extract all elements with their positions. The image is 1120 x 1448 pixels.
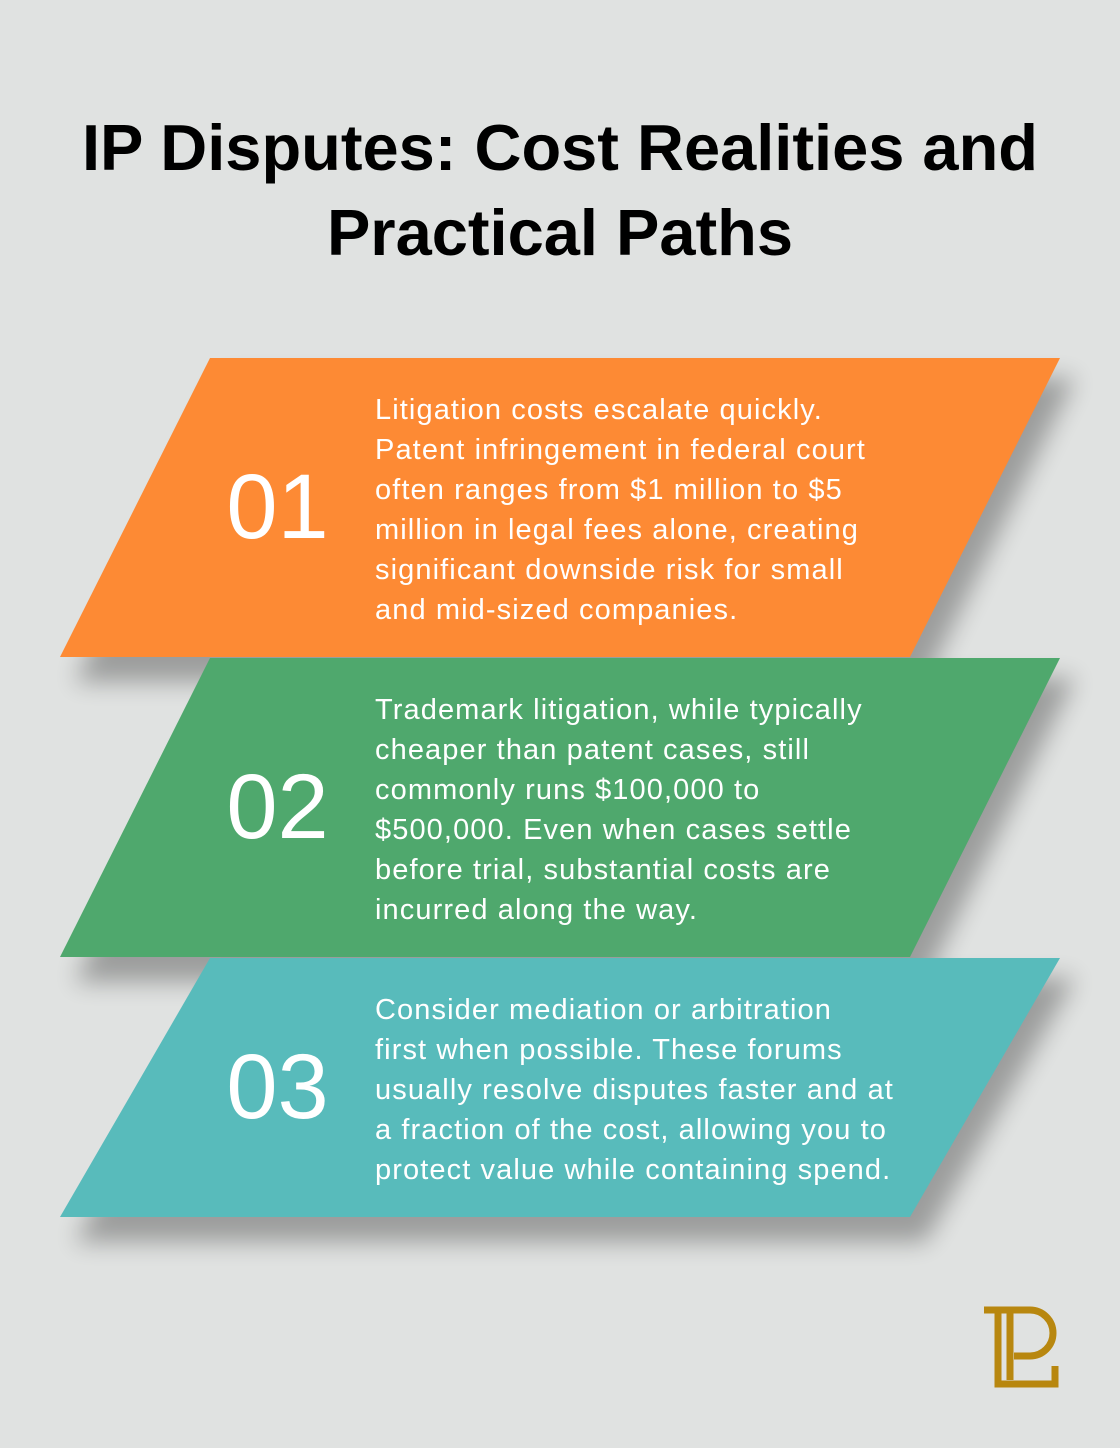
text 02: cheaper than patent cases, still xyxy=(375,734,810,766)
number 02: 02 xyxy=(226,756,329,858)
text 02 xyxy=(375,694,863,926)
text 01: Litigation costs escalate quickly. xyxy=(375,394,823,426)
panel 2 xyxy=(60,658,1060,957)
number 03: 03 xyxy=(226,1036,329,1138)
text 03: Consider mediation or arbitration xyxy=(375,994,832,1026)
panel 3 xyxy=(60,958,1060,1217)
text 01: and mid-sized companies. xyxy=(375,594,738,626)
text 01: million in legal fees alone, creating xyxy=(375,514,859,546)
text 03: a fraction of the cost, allowing you to xyxy=(375,1114,887,1146)
text 03 xyxy=(375,994,894,1186)
text 03: usually resolve disputes faster and at xyxy=(375,1074,894,1106)
title: Practical Paths xyxy=(327,196,793,269)
text 02: $500,000. Even when cases settle xyxy=(375,814,852,846)
text 01: often ranges from $1 million to $5 xyxy=(375,474,843,506)
text 02: before trial, substantial costs are xyxy=(375,854,831,886)
text 03: protect value while containing spend. xyxy=(375,1154,891,1186)
text 01: significant downside risk for small xyxy=(375,554,844,586)
text 01 xyxy=(375,394,866,626)
text 02: commonly runs $100,000 to xyxy=(375,774,760,806)
title xyxy=(82,111,1038,269)
panel 1 xyxy=(60,358,1060,657)
logo xyxy=(984,1310,1055,1384)
text 01: Patent infringement in federal court xyxy=(375,434,866,466)
text 02: incurred along the way. xyxy=(375,894,698,926)
text 03: first when possible. These forums xyxy=(375,1034,843,1066)
text 02: Trademark litigation, while typically xyxy=(375,694,863,726)
title: IP Disputes: Cost Realities and xyxy=(82,111,1038,184)
number 01: 01 xyxy=(226,456,329,558)
